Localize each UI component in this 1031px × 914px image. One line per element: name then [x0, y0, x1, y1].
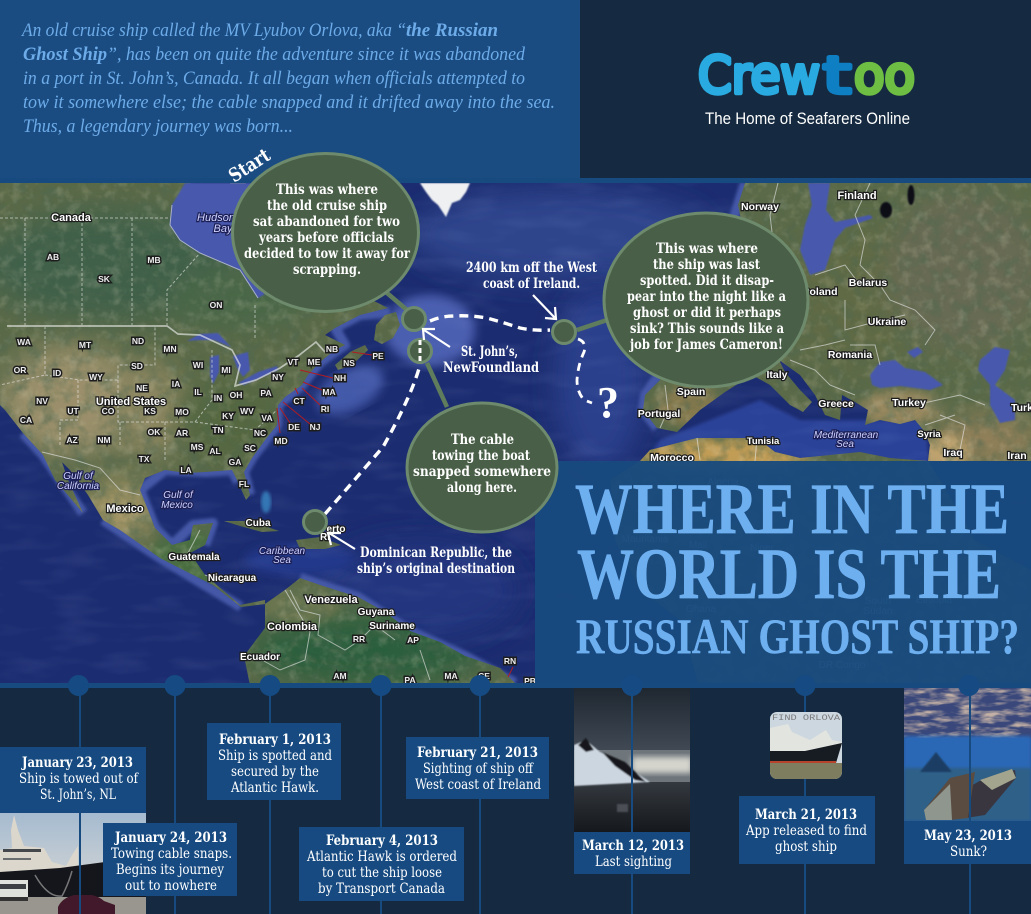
event: January 23: January 23, 2013	[21, 755, 133, 771]
map labels faintly visible under title panel	[622, 477, 953, 671]
state and province labels: VT	[288, 357, 299, 367]
country labels: Ukraine	[868, 316, 906, 328]
map labels faintly visible under title panel: Sudan	[864, 606, 892, 617]
bubble: last spotted: job for James Cameron!	[629, 337, 783, 353]
state and province labels: SD	[131, 361, 143, 371]
state and province labels: MT	[79, 340, 92, 350]
country labels: Belarus	[849, 277, 887, 289]
bubble: cable snapped	[407, 403, 557, 532]
country labels: Tunisia	[747, 436, 780, 447]
country labels: Spain	[677, 386, 705, 398]
state and province labels: OK	[148, 427, 161, 437]
panel: intro background	[0, 0, 580, 178]
country labels: Ecuador	[240, 652, 280, 663]
country labels: Syria	[917, 429, 941, 440]
state and province labels: WI	[193, 360, 203, 370]
country labels: Poland	[802, 286, 838, 298]
connectors between markers and bubbles	[387, 293, 607, 407]
event: February 1: Ship is spotted and	[218, 748, 332, 764]
country labels: Turkey	[892, 397, 926, 409]
state and province labels: NV	[36, 396, 48, 406]
country labels: Canada	[51, 212, 92, 224]
line over ship photo	[79, 813, 81, 914]
location markers	[304, 308, 576, 534]
dashes over St. John's marker	[418, 340, 422, 362]
event: January 23: Ship is towed out of	[19, 771, 139, 787]
state and province labels: NB	[326, 344, 338, 354]
state and province labels: AP	[407, 635, 419, 645]
event: May 23: Sunk?	[950, 844, 987, 860]
map labels faintly visible under title panel: Niger	[750, 543, 775, 554]
state and province labels: ON	[210, 300, 222, 310]
question mark: ?	[597, 378, 619, 427]
bubble: abandoned location: decided to tow it away for	[244, 246, 410, 262]
event: February 4: February 4, 2013	[326, 833, 438, 849]
event: March 21: March 21, 2013	[755, 807, 857, 823]
event: February 1	[207, 723, 341, 800]
event: May 23	[904, 821, 1031, 864]
event: January 24: Begins its journey	[116, 862, 224, 878]
map labels faintly visible under title panel: Ethiopia	[916, 595, 953, 606]
state and province labels: LA	[180, 465, 192, 475]
state and province labels: WA	[17, 337, 31, 347]
country labels: Hudson	[197, 212, 235, 224]
line over last sighting photo	[631, 688, 633, 832]
Greenland and small islands	[230, 183, 470, 513]
intro text block: An old cruise ship called the MV Lyubov Orlova, aka “	[20, 20, 406, 41]
country labels: Colombia	[267, 621, 318, 633]
state and province labels: TN	[212, 425, 224, 435]
state and province labels: GA	[229, 457, 241, 467]
state and province labels: MN	[163, 344, 177, 354]
bubble: abandoned location: years before officials	[258, 230, 394, 246]
timeline dots	[68, 675, 980, 696]
country labels: Guatemala	[168, 552, 220, 563]
intro text block: tow it somewhere else; the cable snapped and it drifted away into the sea.	[23, 92, 555, 113]
bubble: last spotted: This was where	[656, 241, 758, 257]
map labels faintly visible under title panel: Mali	[689, 540, 707, 551]
state and province labels: NS	[343, 358, 355, 368]
country labels: Morocco	[650, 452, 694, 464]
state and province labels: NJ	[310, 422, 321, 432]
red leader lines	[277, 352, 513, 677]
country labels: Nicaragua	[208, 573, 257, 584]
state and province labels: KS	[144, 406, 156, 416]
event: March 12	[574, 832, 690, 874]
logo: Crewtoo	[698, 47, 915, 128]
country labels: Suriname	[369, 621, 415, 632]
map callout: Dominican Republic: ship’s original destination	[357, 561, 515, 577]
map labels faintly visible under title panel: Mauritania	[622, 534, 669, 545]
country labels: Guyana	[358, 607, 395, 618]
country labels: Cuba	[246, 518, 271, 529]
state and province labels: AL	[209, 446, 221, 456]
bubble: abandoned location: scrapping.	[293, 262, 361, 278]
state and province labels: IA	[172, 379, 180, 389]
state and province labels: KY	[222, 411, 234, 421]
intro text block: ”, has been on quite the adventure since it was abandoned	[107, 44, 525, 65]
event: March 21: ghost ship	[775, 839, 837, 855]
state and province labels: MA	[444, 671, 458, 681]
bubble: last spotted: the ship was last	[653, 257, 760, 273]
state and province labels: IL	[194, 387, 202, 397]
country labels: Iran	[1007, 450, 1027, 462]
state and province labels: PE	[372, 351, 384, 361]
photo: last sighting	[574, 688, 692, 832]
event: January 24: January 24, 2013	[114, 830, 227, 846]
state and province labels: MS	[191, 442, 204, 452]
event: January 24: out to nowhere	[125, 878, 217, 894]
event: January 23	[0, 747, 146, 813]
state and province labels: CA	[20, 415, 32, 425]
arrows	[328, 295, 556, 549]
state and province labels	[14, 252, 536, 686]
country labels: Gulf of	[163, 490, 194, 501]
country labels: Iraq	[943, 447, 963, 459]
state and province labels: NY	[272, 372, 284, 382]
logo: Crewtoo: oo	[854, 47, 915, 106]
state and province labels: MD	[274, 436, 288, 446]
state and province labels: FL	[239, 479, 249, 489]
map labels faintly visible under title panel: South	[865, 596, 891, 607]
photo: ship at port	[0, 813, 146, 914]
intro text block: in a port in St. John’s, Canada. It all began when officials attempted to	[23, 68, 525, 89]
state and province labels: CO	[102, 406, 115, 416]
event: March 21: App released to find	[745, 823, 867, 839]
state and province labels: CT	[293, 396, 305, 406]
country labels: United States	[96, 396, 166, 408]
inland seas and lakes	[170, 183, 1015, 423]
state and province labels: RI	[321, 404, 329, 414]
state and province labels: OR	[14, 365, 26, 375]
state and province labels: NM	[97, 435, 111, 445]
state and province labels: NE	[136, 383, 148, 393]
event: February 1: Atlantic Hawk.	[230, 780, 319, 796]
state and province labels: AM	[333, 671, 347, 681]
state and province labels: RN	[504, 656, 516, 666]
country labels: Norway	[741, 201, 779, 213]
event: February 1: February 1, 2013	[219, 732, 331, 748]
event: February 21: February 21, 2013	[417, 745, 538, 761]
country labels: Mexico	[106, 503, 144, 515]
event: January 23: St. John’s, NL	[40, 787, 116, 803]
bubble: abandoned location	[232, 154, 418, 312]
state and province labels: CE	[478, 671, 490, 681]
state and province labels: WV	[240, 406, 254, 416]
ship route dashed lines	[325, 316, 592, 514]
bubble: abandoned location: This was where	[276, 182, 378, 198]
bubble: last spotted: ghost or did it perhaps	[633, 305, 781, 321]
map callout: 2400 km: 2400 km off the West	[466, 260, 597, 276]
country labels: erto	[327, 524, 345, 535]
country labels: Ri	[320, 532, 330, 543]
state and province labels: AR	[176, 428, 188, 438]
state and province labels: MB	[147, 255, 161, 265]
start label: Start	[225, 144, 275, 187]
bubble: cable snapped: snapped somewhere	[413, 464, 551, 480]
intro text block: the Russian	[406, 20, 498, 41]
state and province labels: VA	[261, 413, 273, 423]
state and province labels: WY	[89, 372, 103, 382]
country labels: Italy	[766, 369, 788, 381]
event: March 12: Last sighting	[595, 854, 672, 870]
bubble: last spotted: pear into the night like a	[627, 289, 786, 305]
photo: app icon: FIND ORLOVA	[772, 713, 841, 723]
event: February 4	[299, 827, 464, 901]
country labels: Portugal	[638, 408, 680, 420]
map labels faintly visible under title panel: DR Congo	[819, 660, 866, 671]
national and provincial borders	[0, 183, 985, 680]
intro text block: Ghost Ship	[23, 44, 107, 65]
title panel	[535, 461, 1031, 688]
logo: Crewtoo: The Home of Seafarers Online	[705, 109, 910, 128]
state and province labels: ME	[308, 357, 321, 367]
state and province labels: IN	[214, 393, 222, 403]
country labels: Mediterranean	[814, 430, 879, 441]
bubble: last spotted: sink? This sounds like a	[630, 321, 784, 337]
continental shelves	[23, 183, 745, 683]
bubble: last spotted: spotted. Did it disap-	[640, 273, 774, 289]
state and province labels: SK	[98, 274, 111, 284]
event: March 12: March 12, 2013	[582, 838, 684, 854]
logo: Crewtoo: Crew	[698, 47, 820, 106]
state and province labels: OH	[230, 390, 242, 400]
state and province labels: NC	[254, 428, 266, 438]
event: January 24	[103, 823, 237, 896]
map labels faintly visible under title panel: Algeria	[707, 477, 739, 488]
intro text block: Thus, a legendary journey was born...	[23, 116, 293, 137]
state and province labels: DE	[288, 422, 300, 432]
photo: app icon	[770, 712, 842, 779]
country labels: California	[57, 481, 100, 492]
country labels: Caribbean	[259, 546, 306, 557]
timeline vertical lines	[80, 688, 970, 914]
state and province labels: RR	[353, 634, 365, 644]
bubble: cable snapped: towing the boat	[432, 448, 530, 464]
event: February 1: secured by the	[231, 764, 319, 780]
country labels: Bay	[214, 223, 234, 235]
state and province labels: SC	[244, 443, 256, 453]
state and province labels: PB	[524, 676, 536, 686]
country labels: Greece	[818, 398, 854, 410]
state and province labels: MO	[175, 407, 189, 417]
photo: shipwreck underwater	[904, 688, 1031, 821]
country labels: Mexico	[161, 500, 193, 511]
state and province labels: MA	[322, 387, 336, 397]
event: February 4: Atlantic Hawk is ordered	[306, 849, 457, 865]
state and province labels: NH	[334, 373, 346, 383]
state and province labels: UT	[67, 406, 79, 416]
event: February 4: by Transport Canada	[318, 881, 445, 897]
country labels: Romania	[828, 349, 872, 361]
country labels: Finland	[837, 190, 877, 202]
map callout: Dominican Republic: Dominican Republic, the	[360, 545, 512, 561]
event: February 21: Sighting of ship off	[423, 761, 534, 777]
event: February 21	[406, 737, 549, 799]
map callout: St. John's	[443, 344, 539, 376]
bubble: cable snapped: The cable	[451, 432, 514, 448]
map callout: 2400 km	[466, 260, 597, 292]
bubble: abandoned location: sat abandoned for two	[253, 214, 400, 230]
state and province labels: PA	[404, 675, 416, 685]
state and province labels: AZ	[66, 435, 78, 445]
map callout: St. John's: NewFoundland	[443, 360, 539, 376]
line over shipwreck photo	[969, 688, 971, 821]
bubble: abandoned location: the old cruise ship	[267, 198, 387, 214]
event: February 21: West coast of Ireland	[415, 777, 541, 793]
event: January 24: Towing cable snaps.	[111, 846, 232, 862]
map callout: St. John's: St. John’s,	[461, 344, 518, 360]
horizontal timeline band	[0, 683, 1031, 688]
event: March 21	[739, 796, 875, 864]
event: February 4: to cut the ship loose	[322, 865, 442, 881]
ocean	[0, 183, 1031, 683]
state and province labels: TX	[139, 454, 150, 464]
state and province labels: AB	[47, 252, 59, 262]
map labels faintly visible under title panel: Ghana	[686, 604, 716, 615]
country labels: Sea	[836, 439, 854, 450]
map callout: 2400 km: coast of Ireland.	[483, 276, 580, 292]
state and province labels: PA	[260, 388, 272, 398]
bubble: last spotted	[604, 213, 808, 387]
horizontal band under header	[0, 178, 1031, 183]
bubble: cable snapped: along here.	[447, 480, 517, 496]
state and province labels: ID	[53, 368, 61, 378]
state and province labels: MI	[221, 365, 231, 375]
logo: Crewtoo: t	[823, 47, 851, 106]
country labels	[51, 190, 1031, 663]
country labels: Venezuela	[304, 594, 358, 606]
event: May 23: May 23, 2013	[924, 828, 1012, 844]
land masses	[0, 183, 1031, 693]
state and province labels: ND	[132, 336, 144, 346]
satellite world map	[0, 183, 1031, 693]
country labels: Sea	[273, 555, 291, 566]
intro text block	[20, 20, 555, 137]
country labels: Gulf of	[63, 471, 94, 482]
map callout: Dominican Republic	[357, 545, 515, 577]
